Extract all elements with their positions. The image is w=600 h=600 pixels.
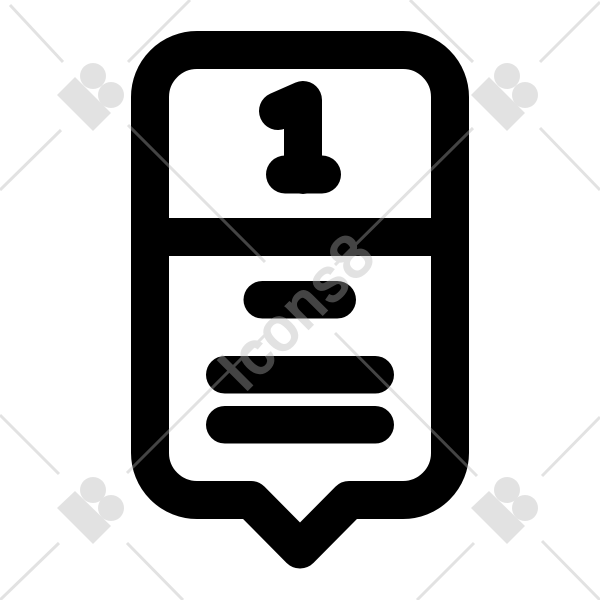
watermark text: Icons8	[206, 220, 388, 402]
watermark logo top right	[471, 63, 538, 131]
long text line two	[206, 406, 394, 444]
divider bar	[150, 218, 450, 256]
numeral 1	[278, 100, 322, 175]
icon: numbered location marker	[150, 50, 450, 550]
marker outline with pointer	[150, 50, 450, 550]
watermark logo bottom right	[471, 477, 538, 544]
watermark logo top left	[57, 63, 124, 131]
long text line one	[206, 356, 394, 394]
short text line	[244, 281, 356, 318]
watermark logo bottom left	[57, 477, 124, 544]
